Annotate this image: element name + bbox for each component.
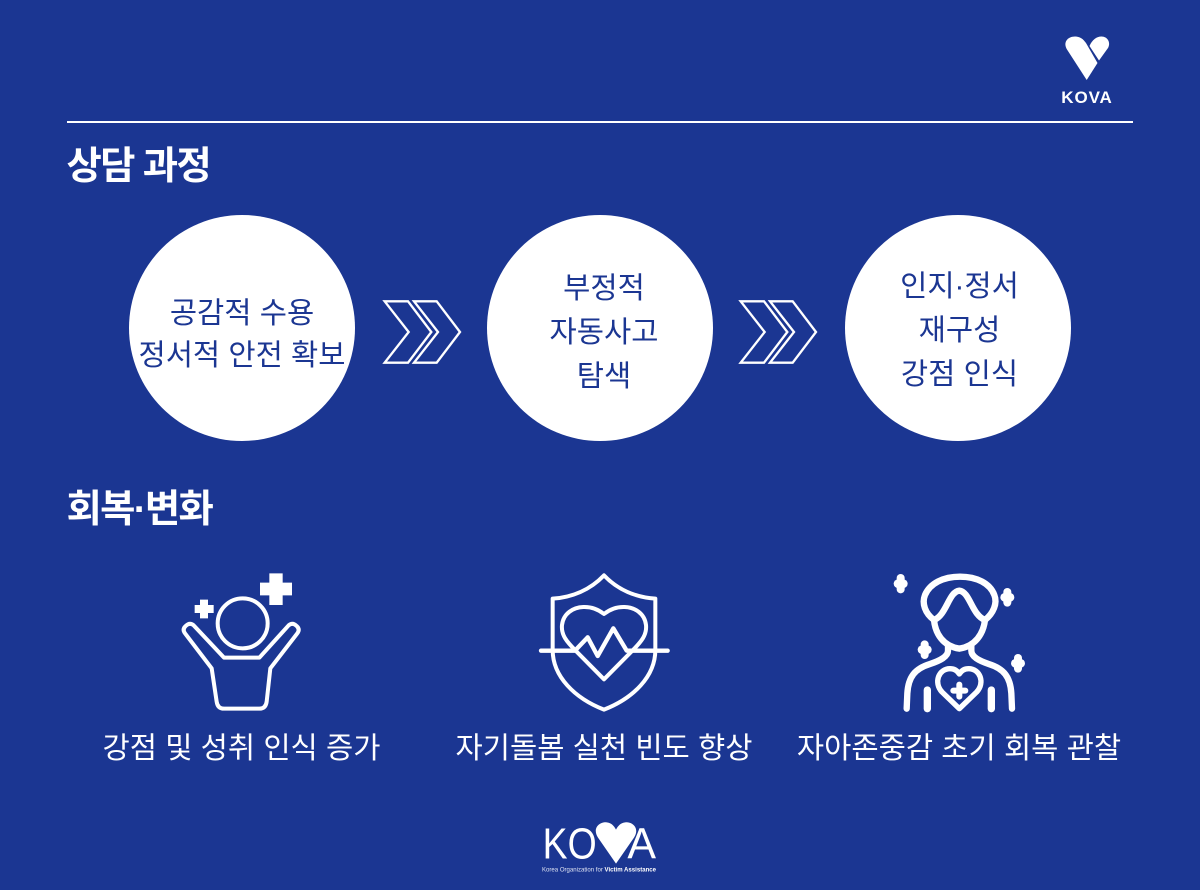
icon: person with heart and sparkles bbox=[894, 574, 1025, 712]
icon: heart mark bbox=[1065, 36, 1110, 80]
circle: step 1 bbox=[129, 215, 355, 441]
circle: step 2: 자동사고 bbox=[550, 316, 658, 349]
circle: step 2: 부정적 bbox=[563, 272, 645, 305]
logo wordmark with heart: KO bbox=[543, 820, 597, 868]
arrow: step 1 to 2 bbox=[382, 300, 462, 364]
label: self esteem: 자아존중감 초기 회복 관찰 bbox=[797, 732, 1121, 765]
icon: shield with heartbeat bbox=[538, 573, 670, 712]
circle: step 1: 공감적 수용 bbox=[170, 297, 314, 330]
circle: step 3 bbox=[845, 215, 1071, 441]
heading: recovery and change: 회복·변화 bbox=[66, 488, 212, 530]
logo wordmark with heart: A bbox=[627, 820, 656, 868]
circle: step 3: 강점 인식 bbox=[901, 358, 1018, 391]
icon: person with raised arms bbox=[182, 573, 301, 711]
circle: step 3: 인지·정서 bbox=[900, 270, 1019, 303]
label: self care: 자기돌봄 실천 빈도 향상 bbox=[456, 732, 752, 765]
arrow: step 2 to 3 bbox=[738, 300, 818, 364]
bottom logo bbox=[542, 820, 656, 874]
circle: step 3: 재구성 bbox=[919, 314, 1000, 347]
logo wordmark: KOVA bbox=[1061, 88, 1113, 107]
logo wordmark with heart bbox=[542, 820, 656, 874]
header rule bbox=[67, 121, 1133, 123]
label: strengths: 강점 및 성취 인식 증가 bbox=[103, 732, 380, 765]
circle: step 1: 정서적 안전 확보 bbox=[138, 339, 346, 372]
top logo bbox=[1061, 36, 1113, 107]
heading: counselling process: 상담 과정 bbox=[66, 144, 210, 188]
circle: step 2 bbox=[487, 215, 713, 441]
circle: step 2: 탐색 bbox=[577, 360, 631, 393]
logo wordmark with heart: Korea Organization for Victim Assistance bbox=[542, 867, 656, 874]
